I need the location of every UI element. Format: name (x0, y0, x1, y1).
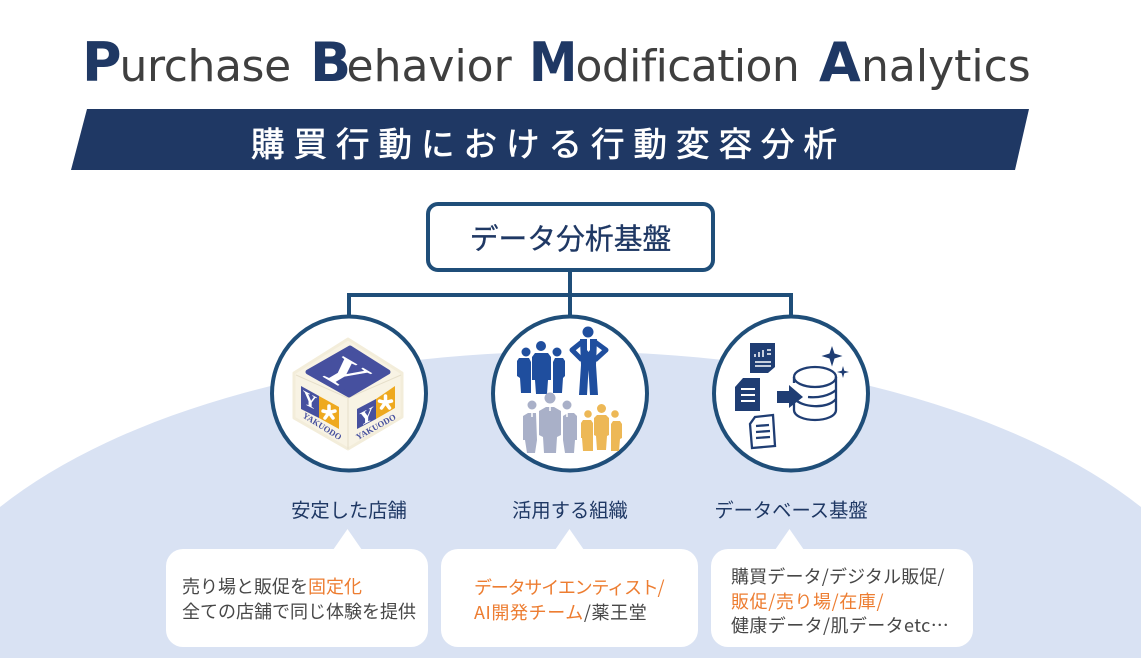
subtitle banner (71, 109, 1029, 170)
heading box: data analysis platform (426, 202, 715, 272)
callout: organization: AI開発チーム/薬王堂 (474, 598, 647, 624)
callout: database platform: 健康データ/肌データetc… (731, 612, 949, 638)
title: nalytics (861, 41, 1031, 92)
title: A (819, 31, 861, 94)
label: database platform: データベース基盤 (714, 495, 868, 523)
icon: Yakuodo cube in circle (270, 314, 428, 472)
title: M (529, 32, 577, 95)
callout: stable stores: 売り場と販促を固定化 (182, 573, 362, 599)
heading box: data analysis platform: データ分析基盤 (470, 217, 671, 258)
icon: Yakuodo cube in circle: Y (359, 401, 374, 432)
callout: database platform (711, 529, 973, 647)
label: stable stores: 安定した店舗 (291, 495, 407, 523)
subtitle banner: 購買行動における行動変容分析 (251, 117, 846, 166)
icon: Yakuodo cube in circle: YAKUODO (354, 411, 398, 442)
icon: Yakuodo cube in circle: Y (305, 350, 383, 396)
title: ehavior (346, 41, 513, 92)
title: B (310, 31, 351, 94)
title (82, 31, 1031, 95)
callout: stable stores: 全ての店舗で同じ体験を提供 (182, 598, 416, 624)
title: urchase (120, 41, 291, 92)
callout: database platform: 購買データ/デジタル販促/ (731, 563, 945, 589)
title: P (82, 31, 122, 94)
icon: documents flowing into database (712, 314, 870, 472)
callout: stable stores (166, 529, 428, 647)
callout: organization: データサイエンティスト/ (474, 574, 663, 600)
label: organization: 活用する組織 (512, 495, 628, 523)
icon: people groups in circle (491, 314, 649, 472)
title: odification (576, 41, 799, 92)
icon: Yakuodo cube in circle: Y (303, 385, 317, 416)
callout: organization (441, 529, 698, 647)
icon: Yakuodo cube in circle: YAKUODO (301, 410, 344, 442)
callout: database platform: 販促/売り場/在庫/ (731, 588, 884, 614)
